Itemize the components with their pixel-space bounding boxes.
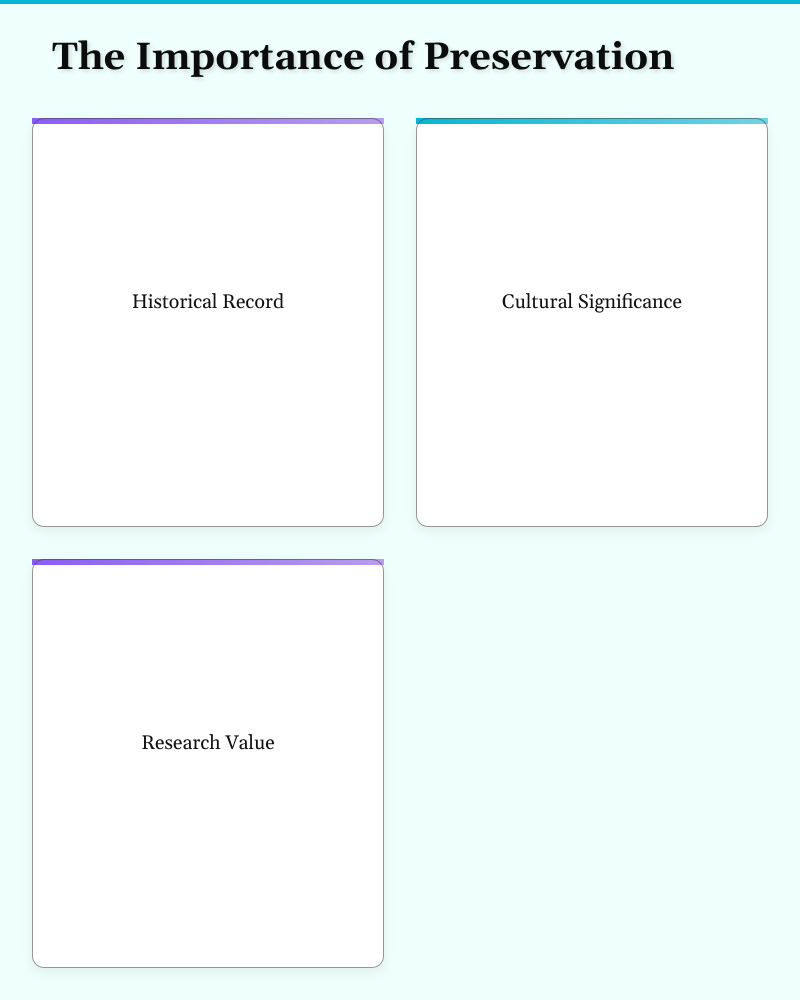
panel accent bar: teal [416, 118, 768, 124]
top accent bar [0, 0, 800, 4]
panel: Research Value [32, 559, 384, 968]
panel accent bar: purple [32, 559, 384, 565]
panel accent bar: purple [32, 118, 384, 124]
panel label: Historical Record: Historical Record [132, 290, 284, 315]
panel: Historical Record [32, 118, 384, 527]
panel label: Cultural Significance: Cultural Significance [502, 290, 682, 315]
title: The Importance of Preservation [52, 34, 674, 82]
panel: Cultural Significance [416, 118, 768, 527]
panel label: Research Value: Research Value [141, 731, 275, 756]
